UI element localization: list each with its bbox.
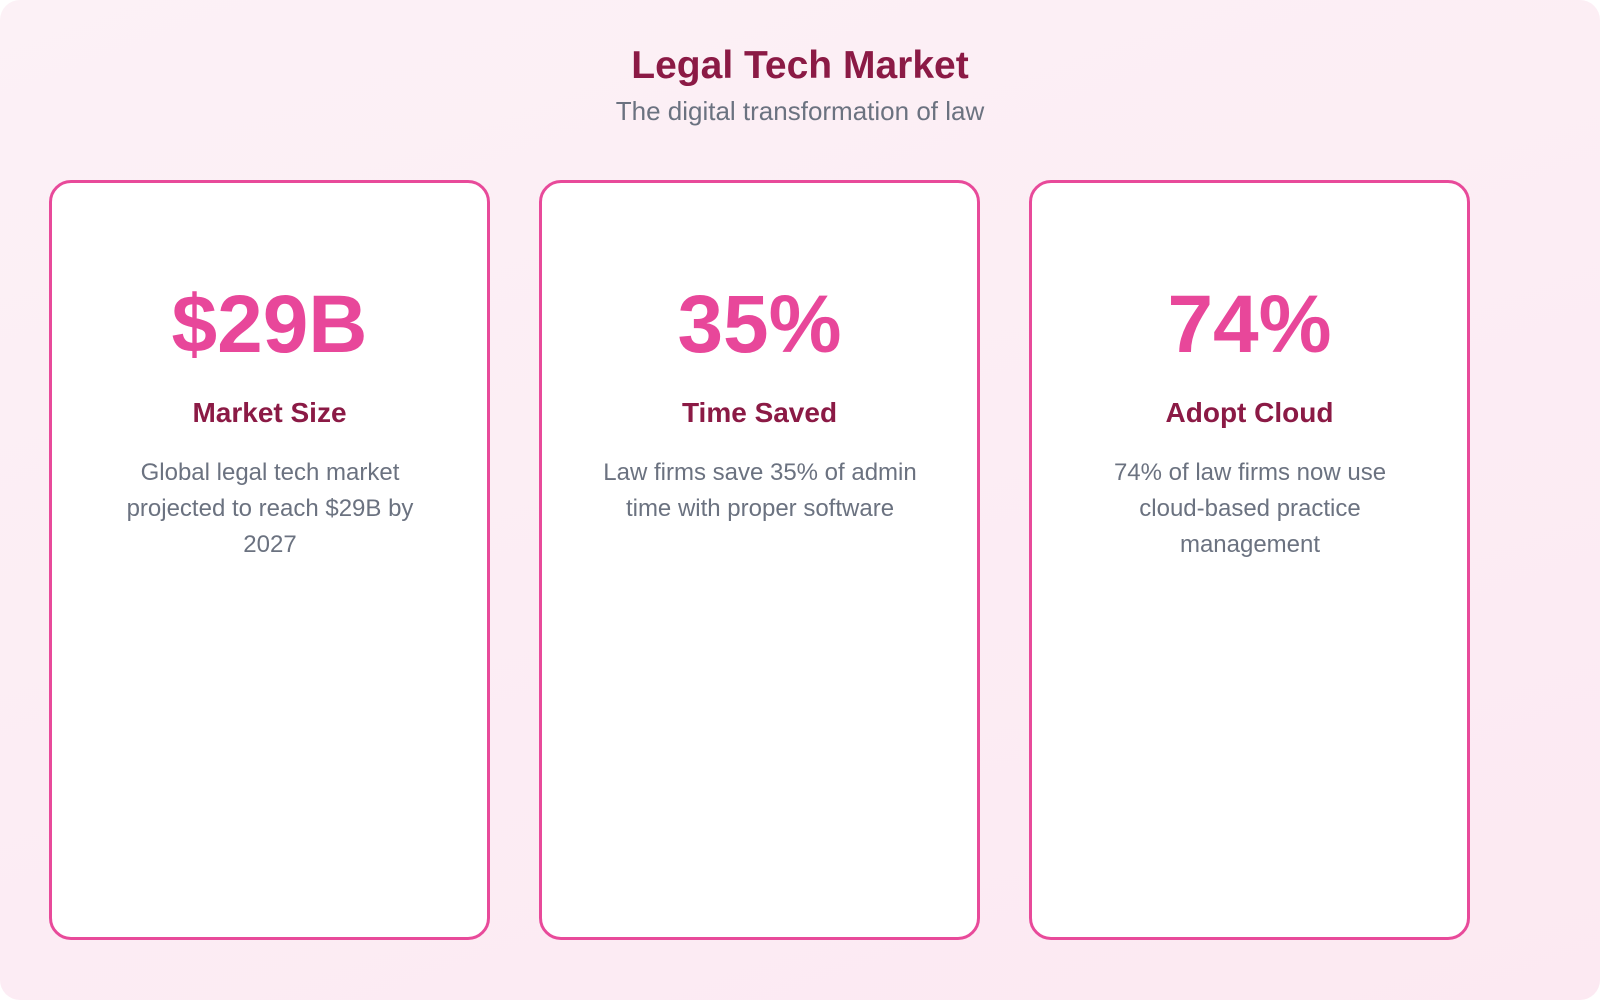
big number: 35% bbox=[677, 279, 842, 370]
panel: market size bbox=[49, 180, 490, 940]
label: Market Size bbox=[192, 397, 347, 428]
title: Legal Tech Market bbox=[631, 44, 969, 87]
label: Time Saved bbox=[682, 397, 837, 428]
big number: $29B bbox=[171, 279, 368, 370]
panel: time saved bbox=[539, 180, 980, 940]
big number: 74% bbox=[1167, 279, 1332, 370]
description: Law firms save 35% of admin time with proper software bbox=[603, 459, 917, 522]
description: 74% of law firms now use cloud-based practice management bbox=[1114, 459, 1386, 558]
label: Adopt Cloud bbox=[1166, 397, 1333, 428]
description: Global legal tech market projected to reach $29B by 2027 bbox=[127, 459, 413, 558]
panel: adopt cloud bbox=[1029, 180, 1470, 940]
subtitle: The digital transformation of law bbox=[616, 96, 984, 126]
